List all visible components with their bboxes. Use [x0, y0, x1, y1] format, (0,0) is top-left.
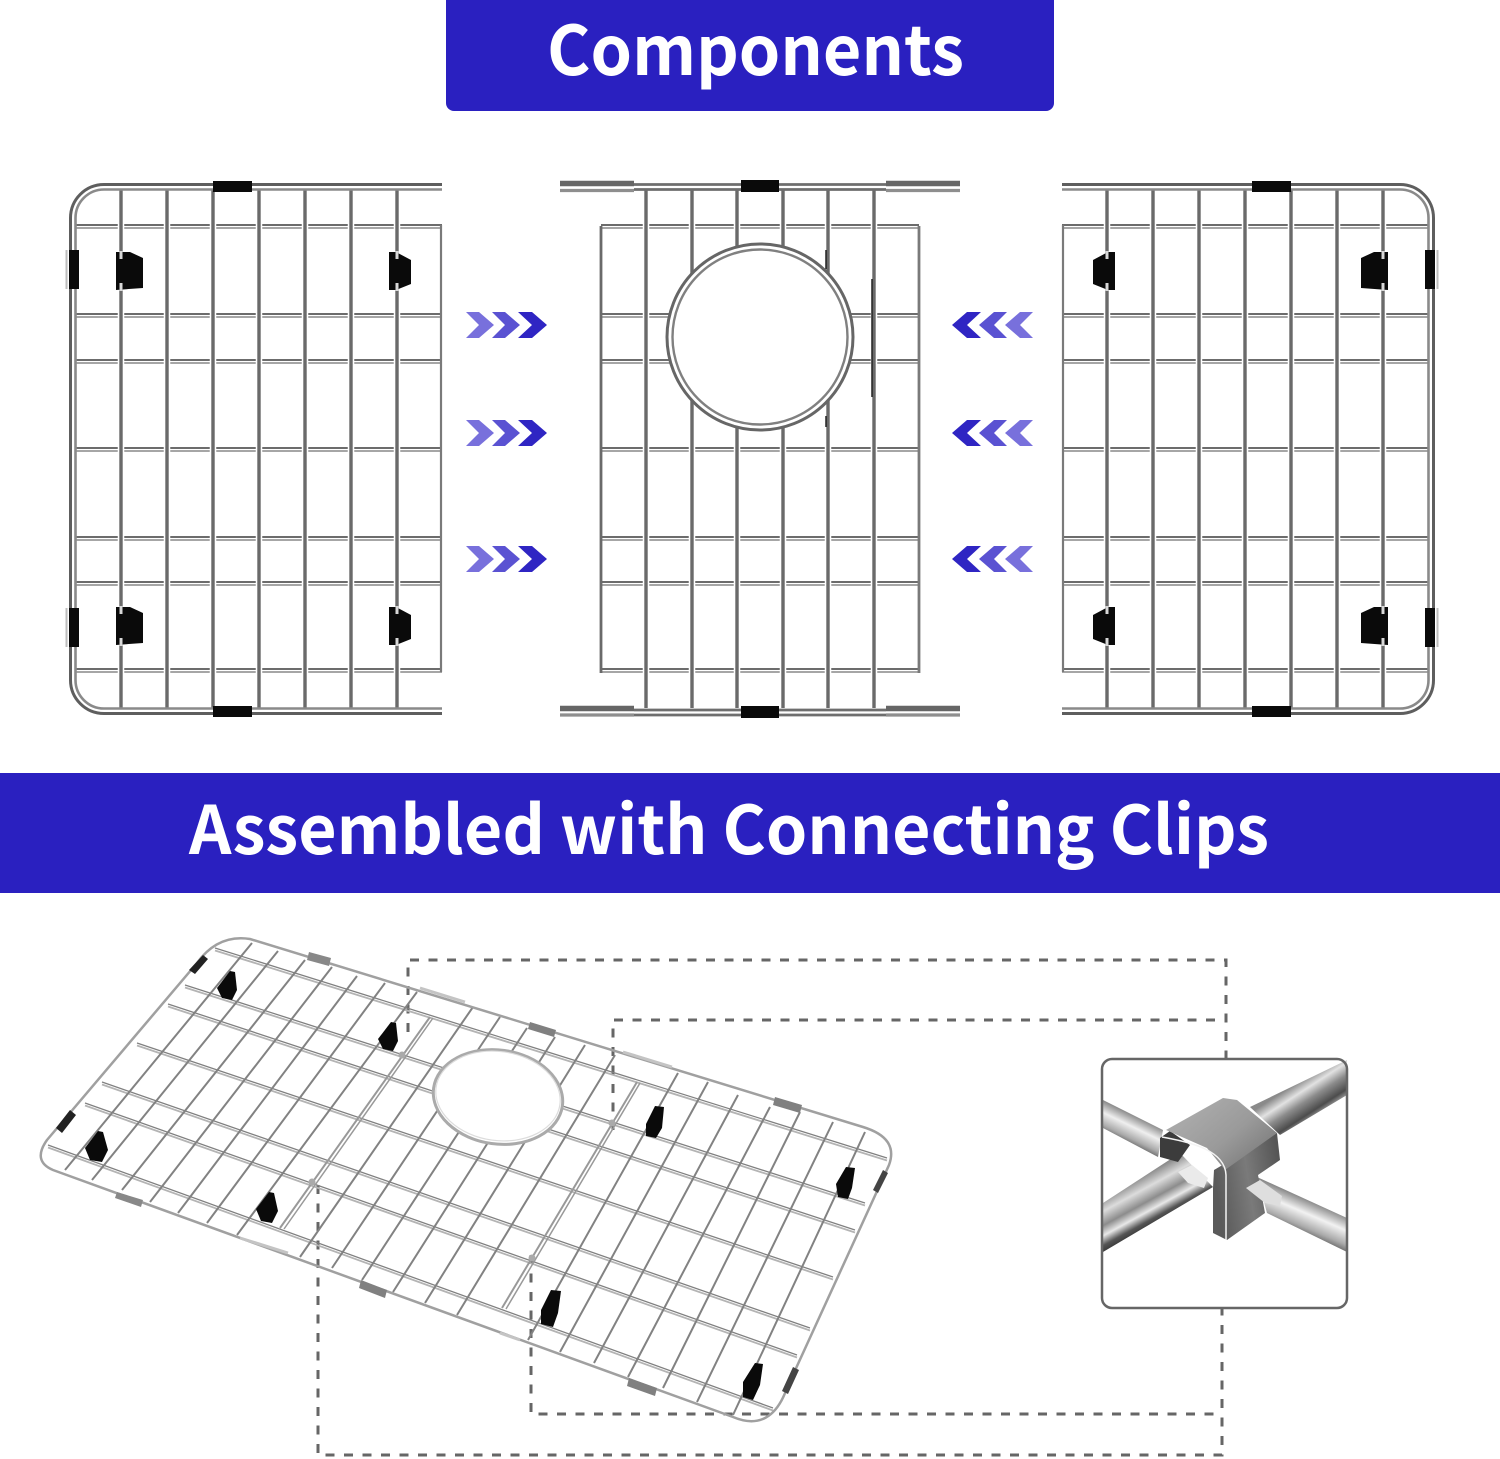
heading: Assembled with Connecting Clips [0, 773, 1500, 893]
heading: Assembled with Connecting Clips: Assembled with Connecting Clips [188, 777, 1269, 874]
assembled sink grid in perspective [41, 938, 891, 1421]
assembled drain hole [427, 1041, 569, 1153]
panel: middle grid section [560, 180, 960, 718]
tube: lower left [1103, 1153, 1213, 1252]
tube: upper right [1250, 1060, 1347, 1135]
tube: upper left [1103, 1100, 1163, 1157]
tube: lower right [1257, 1177, 1347, 1252]
clip body [1160, 1098, 1282, 1240]
drain hole ring [667, 244, 853, 430]
zoom callout: connecting clip detail [1102, 1059, 1347, 1308]
panel: right grid section [1062, 181, 1438, 717]
dashed callout lines [318, 960, 1226, 1455]
panel: left grid section [66, 181, 442, 717]
arrows: left chevrons [466, 312, 547, 572]
arrows: right chevrons [952, 312, 1033, 572]
heading: Components [446, 0, 1054, 111]
